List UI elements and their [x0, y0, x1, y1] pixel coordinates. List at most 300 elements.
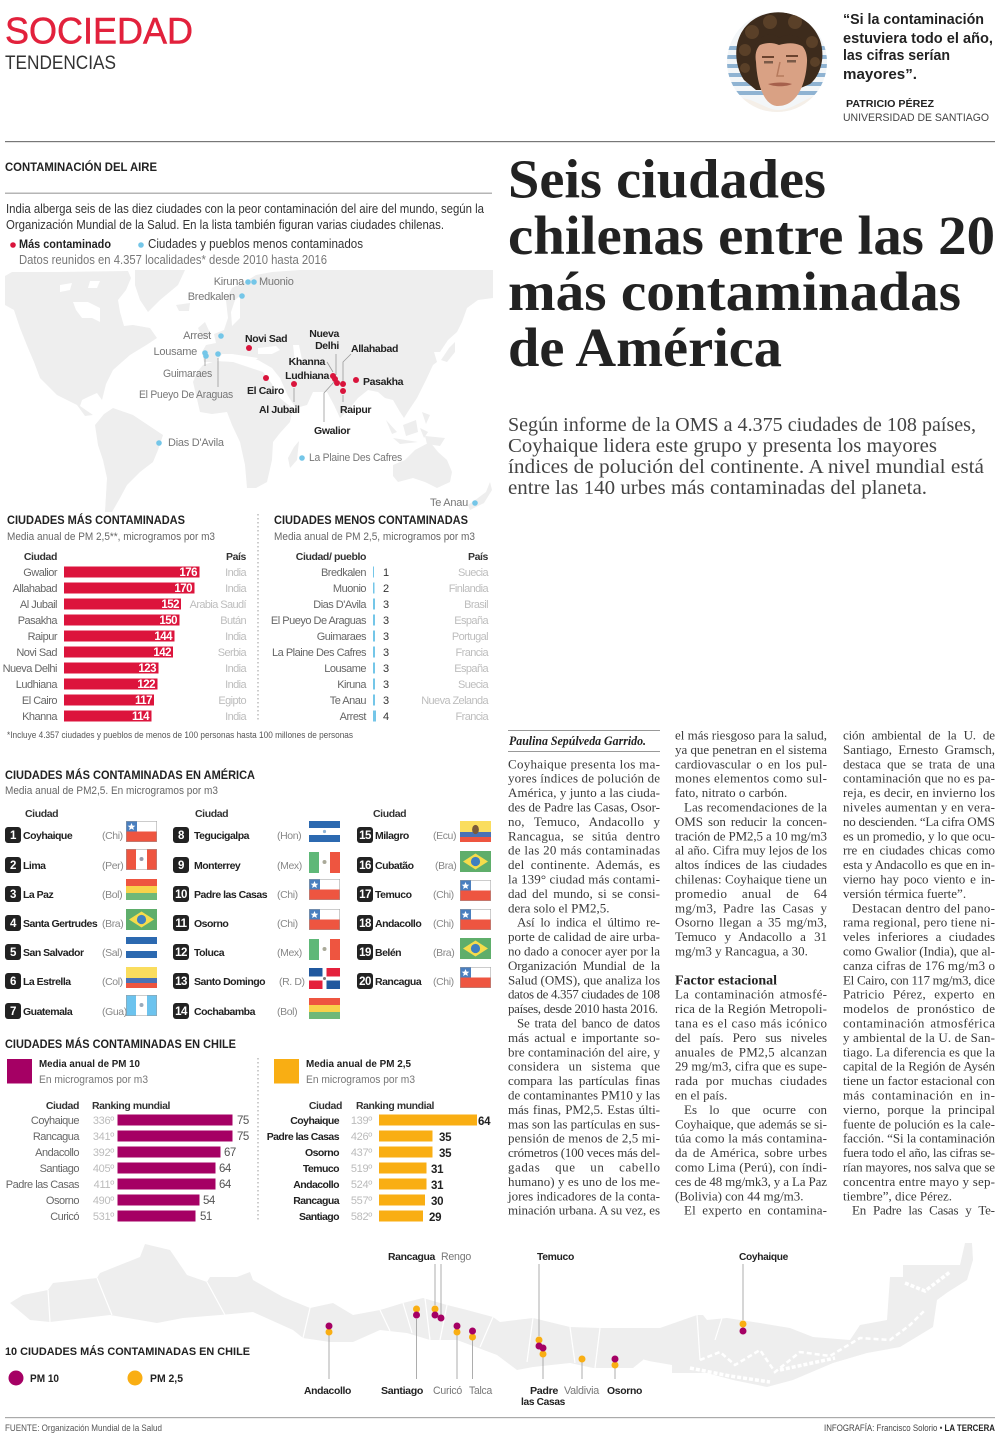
bar chart: PM 10: Rancagua	[33, 1131, 80, 1143]
table: ciudades más contaminadas: India	[225, 567, 247, 579]
table: ciudades más contaminadas: India	[225, 583, 247, 595]
table: ciudades más contaminadas: 117	[135, 695, 152, 707]
table: ciudades menos contaminadas: Francia	[456, 711, 489, 723]
list: ciudades más contaminadas en América: Tegucigalpa	[194, 830, 250, 842]
list: ciudades más contaminadas en América: 16	[359, 860, 371, 872]
world map: Bredkalen	[188, 291, 235, 303]
table: ciudades menos contaminadas: 1	[383, 567, 389, 579]
article column 2: anuales de PM2,5 alcanzan	[675, 1044, 828, 1059]
table: ciudades más contaminadas: 122	[137, 679, 155, 691]
list: ciudades más contaminadas en América: Toluca	[194, 947, 225, 959]
list: ciudades más contaminadas en América: 18	[359, 918, 372, 930]
table: ciudades menos contaminadas: Ciudad/ pueblo	[296, 551, 366, 563]
article column 3: es un promedio, y lo que ocu-	[843, 828, 995, 843]
article column 1: porte de calidad de aire urba-	[508, 929, 660, 944]
map of Chile with city markers	[10, 1243, 973, 1408]
article column 2: Osorno llegan a 35 mg/m3,	[675, 915, 827, 930]
article column 2: tana es el caso más icónico	[675, 1016, 827, 1030]
article column 2: el más riesgoso para la salud,	[675, 728, 827, 742]
article column 2: túa como la más contamina-	[675, 1131, 827, 1146]
table: ciudades menos contaminadas: Suecia	[458, 567, 489, 579]
map of Chile with city markers: Osorno	[607, 1385, 642, 1397]
list: ciudades más contaminadas en América: (Chi)	[433, 889, 454, 901]
table: ciudades más contaminadas: Ciudad	[24, 551, 57, 563]
bar chart: PM 10: 490º	[93, 1195, 114, 1207]
table: ciudades menos contaminadas: La Plaine Des Cafres	[272, 647, 367, 659]
article column 2: da de América, sobre urbes	[675, 1145, 827, 1160]
table: ciudades menos contaminadas: Nueva Zelanda	[421, 695, 489, 707]
intro text	[6, 202, 484, 232]
list: ciudades más contaminadas en América: (Mex)	[277, 947, 302, 959]
table: ciudades menos contaminadas: País	[468, 551, 489, 563]
bar chart: PM 2,5	[267, 1058, 491, 1224]
map legend	[10, 237, 363, 267]
table: ciudades más contaminadas: 170	[174, 583, 192, 595]
article column 3: versión térmica fuerte”.	[843, 886, 966, 901]
article column 2: tración de PM2,5 a 10 mg/m3	[675, 828, 827, 843]
world map: Novi Sad	[245, 333, 287, 345]
article column 2: del país. Pero sus niveles	[675, 1030, 827, 1045]
article column 3: más contaminación en in-	[843, 1088, 995, 1102]
article column 1: Organización Mundial de la	[508, 958, 660, 973]
list: ciudades más contaminadas en América: Cubatão	[375, 860, 414, 872]
world map: El Cairo	[247, 385, 284, 397]
world map: Arrest	[183, 330, 211, 342]
bar chart: PM 2,5: Rancagua	[293, 1195, 340, 1207]
article column 1: Salud (OMS), que analiza los	[508, 972, 660, 987]
bar chart: PM 10: Curicó	[50, 1211, 79, 1223]
list: ciudades más contaminadas en América: 19	[359, 947, 371, 959]
world map: Gwalior	[314, 425, 350, 437]
pull quote: “Si la contaminación	[843, 12, 984, 28]
deck: índices de polución del continente. A nivel mundial está	[508, 456, 984, 478]
deck	[508, 414, 984, 499]
bar chart: PM 10: Coyhaique	[31, 1115, 79, 1127]
list: ciudades más contaminadas en América: 20	[359, 976, 371, 988]
table: ciudades más contaminadas: CIUDADES MÁS CONTAMINADAS	[7, 512, 185, 527]
table: ciudades más contaminadas: 144	[154, 631, 173, 643]
world map: Nueva	[309, 328, 340, 340]
table: ciudades menos contaminadas: 4	[383, 711, 389, 723]
article column 1: mas son las partículas en sus-	[508, 1116, 660, 1131]
headline: de América	[508, 317, 782, 378]
article column 1: crómetros (100 veces más del-	[508, 1145, 660, 1160]
table: ciudades más contaminadas: 150	[159, 615, 177, 627]
bar chart: PM 2,5: 64	[478, 1116, 491, 1128]
headline: chilenas entre las 20	[508, 205, 995, 266]
headline: Seis ciudades	[508, 148, 826, 210]
article column 3: El Cairo, con 117 mg/m3, dice	[843, 972, 995, 987]
list: ciudades más contaminadas en América: 17	[359, 889, 371, 901]
bar chart: PM 10: En microgramos por m3	[39, 1074, 148, 1086]
article column 3: contaminación que no es pa-	[843, 771, 995, 786]
article column 3: canza cifras de 176 mg/m3 o	[843, 958, 995, 973]
list: ciudades más contaminadas en América: (Chi)	[277, 918, 298, 930]
table: ciudades más contaminadas: India	[225, 711, 247, 723]
article column 3: Santiago, Ernesto Gramsch,	[843, 742, 995, 757]
article column 1: considera un sistema que	[508, 1059, 660, 1074]
table: ciudades más contaminadas: Ludhiana	[16, 679, 58, 691]
list: ciudades más contaminadas en América: Monterrey	[194, 860, 241, 872]
list: ciudades más contaminadas en América: (Bra)	[435, 860, 456, 872]
bar chart: PM 2,5: 29	[429, 1212, 441, 1224]
bar chart: PM 10: Andacollo	[35, 1147, 79, 1159]
article column 3: no descienden. “La cifra OMS	[843, 814, 995, 829]
world map: Dias D'Avila	[168, 437, 225, 449]
pull quote	[843, 12, 993, 124]
bar chart: PM 10	[6, 1058, 249, 1223]
map legend: 10 ciudades más contaminadas en Chile: 10 CIUDADES MÁS CONTAMINADAS EN CHILE	[5, 1345, 250, 1358]
world map: El Pueyo De Araguas	[139, 389, 234, 401]
world map: Kiruna	[214, 276, 245, 288]
table: ciudades más contaminadas: 176	[179, 567, 197, 579]
table: ciudades más contaminadas: País	[226, 551, 247, 563]
intro text: Organización Mundial de la Salud. En la lista también figuran varias ciudades chilenas.	[6, 218, 444, 232]
map of Chile with city markers: Curicó	[433, 1385, 462, 1397]
pull quote: PATRICIO PÉREZ	[846, 97, 935, 110]
list: ciudades más contaminadas en América: 3	[10, 889, 16, 901]
bar chart: PM 2,5: Santiago	[299, 1211, 339, 1223]
bar chart: PM 2,5: 139º	[351, 1115, 372, 1127]
article column 2: Es lo que ocurre con	[684, 1102, 828, 1117]
list: ciudades más contaminadas en América: (Chi)	[102, 830, 123, 842]
world map: La Plaine Des Cafres	[309, 452, 403, 464]
table: ciudades menos contaminadas: 3	[383, 647, 389, 659]
map of Chile with city markers: Rancagua	[388, 1251, 435, 1263]
list: ciudades más contaminadas en América: 5	[10, 947, 17, 959]
table: ciudades más contaminadas: Khanna	[22, 711, 58, 723]
article column 2: promedio anual de 64	[675, 886, 828, 901]
pull quote: mayores”.	[843, 67, 917, 83]
table: ciudades más contaminadas: El Cairo	[22, 695, 57, 707]
table: ciudades más contaminadas: Al Jubail	[20, 599, 57, 611]
bar chart: PM 10: Ciudad	[46, 1100, 79, 1112]
article column 1: Así lo indica el último re-	[517, 915, 660, 930]
world map: Te Anau	[430, 497, 468, 509]
article column 3: vierno, porque la principal	[843, 1102, 995, 1117]
article column 3: fuente de polución es la cale-	[843, 1116, 995, 1131]
table: ciudades menos contaminadas: Kiruna	[337, 679, 367, 691]
list: ciudades más contaminadas en América: 8	[178, 830, 185, 842]
pull quote: las cifras serían	[843, 48, 950, 64]
deck: Según informe de la OMS a 4.375 ciudades de 108 países,	[508, 414, 976, 436]
map legend: 10 ciudades más contaminadas en Chile: PM 10	[30, 1373, 59, 1385]
article column 1: minación urbana. A su vez, es	[508, 1203, 660, 1218]
pull quote: estuviera todo el año,	[843, 31, 993, 47]
table: ciudades menos contaminadas: 3	[383, 615, 389, 627]
pull quote: UNIVERSIDAD DE SANTIAGO	[843, 112, 989, 124]
map of Chile with city markers: Andacollo	[304, 1385, 351, 1397]
table: ciudades más contaminadas: Pasakha	[18, 615, 58, 627]
map legend: Más contaminado	[19, 237, 111, 251]
article column 2: (Bolivia) con 44 mg/m3.	[675, 1188, 804, 1203]
list: ciudades más contaminadas en América: Milagro	[375, 830, 409, 842]
bar chart: PM 10: 336º	[93, 1115, 114, 1127]
list: ciudades más contaminadas en América: Andacollo	[375, 918, 421, 930]
list: ciudades más contaminadas en América: (Chi)	[277, 889, 298, 901]
map legend: 10 ciudades más contaminadas en Chile: PM 2,5	[150, 1373, 183, 1385]
source and credit	[5, 1423, 995, 1434]
list: ciudades más contaminadas en América: 13	[175, 976, 187, 988]
table: ciudades menos contaminadas: El Pueyo De Araguas	[271, 615, 367, 627]
map of Chile with city markers: las Casas	[521, 1396, 565, 1408]
world map: Delhi	[315, 340, 339, 352]
list: ciudades más contaminadas en América: Lima	[23, 860, 46, 872]
section header	[5, 10, 193, 74]
world map: Muonio	[259, 276, 294, 288]
list: ciudades más contaminadas en América: Belén	[375, 947, 401, 959]
map legend: Datos reunidos en 4.357 localidades* desde 2010 hasta 2016	[19, 253, 327, 267]
section header: TENDENCIAS	[5, 53, 116, 74]
list: ciudades más contaminadas en América: (R. D)	[279, 976, 305, 988]
map legend: Ciudades y pueblos menos contaminados	[148, 237, 363, 251]
bar chart: PM 2,5: 31	[431, 1180, 444, 1192]
list: ciudades más contaminadas en América: Santo Domingo	[194, 976, 265, 988]
article column 2: altos índices de las ciudades	[675, 857, 827, 872]
list: ciudades más contaminadas en América: Cochabamba	[194, 1006, 256, 1018]
bar chart: PM 2,5: Padre las Casas	[267, 1131, 340, 1143]
article column 3: esta y Andacollo es que en in-	[843, 857, 995, 872]
article column 2: como Lima (Perú), con índi-	[675, 1160, 827, 1174]
bar chart: PM 10: 341º	[93, 1131, 114, 1143]
table: ciudades menos contaminadas: 3	[383, 679, 389, 691]
article column 2: Factor estacional	[675, 973, 777, 988]
bar chart: PM 10: Padre las Casas	[6, 1179, 80, 1191]
article column 1: dad del mundo, si se consi-	[508, 886, 660, 901]
table: ciudades menos contaminadas: Muonio	[333, 583, 366, 595]
table: ciudades menos contaminadas: 3	[383, 695, 389, 707]
bar chart: PM 10: 67	[224, 1147, 236, 1159]
article column 1: Rancagua, se sitúa dentro	[508, 828, 660, 843]
byline: Paulina Sepúlveda Garrido.	[509, 734, 646, 748]
bar chart: PM 2,5: Ranking mundial	[356, 1100, 434, 1112]
list: ciudades más contaminadas en América: (Bra)	[102, 918, 123, 930]
table: ciudades menos contaminadas: Arrest	[340, 711, 366, 723]
article column 2: mg/m3, Padre las Casas y	[675, 900, 828, 915]
article column 3: modelos de pronóstico de	[843, 1001, 995, 1016]
bar chart: PM 2,5: 437º	[351, 1147, 372, 1159]
article column 2: mones elementos como sul-	[675, 771, 827, 786]
list: ciudades más contaminadas en América: (Bol)	[277, 1006, 297, 1018]
table: ciudades más contaminadas: Nueva Delhi	[3, 663, 57, 675]
article column 1: des de Padre las Casas, Osor-	[508, 800, 660, 814]
article column 2: ya que penetran en el sistema	[675, 742, 827, 757]
article column 2: Temuco y Andacollo a 31	[675, 929, 827, 944]
article column 3: rama regional, pero tiene ni-	[843, 915, 995, 930]
list: ciudades más contaminadas en América: La Paz	[23, 889, 54, 901]
heading: ciudades más contaminadas en Chile: CIUDADES MÁS CONTAMINADAS EN CHILE	[5, 1036, 236, 1051]
article column 3: tiago. La diferencia es que la	[843, 1044, 995, 1059]
bar chart: PM 2,5: 524º	[351, 1179, 372, 1191]
article column 1: la 139° ciudad más contami-	[508, 872, 660, 886]
article column 2: cardiovascular o en los pul-	[675, 756, 827, 771]
world map: Raipur	[340, 404, 371, 416]
world map: Lousame	[153, 346, 197, 358]
list: ciudades más contaminadas en América: Coyhaique	[23, 830, 73, 842]
bar chart: PM 2,5: Ciudad	[309, 1100, 342, 1112]
article column 2: al año. Cifra muy lejos de los	[675, 843, 827, 858]
list: ciudades más contaminadas en América: (Chi)	[433, 976, 454, 988]
world map: Ludhiana	[285, 370, 330, 382]
table: ciudades menos contaminadas: 3	[383, 599, 389, 611]
article column 1: jores indicadores de la conta-	[507, 1188, 660, 1203]
list: ciudades más contaminadas en América: (Gua)	[102, 1006, 127, 1018]
article column 3: niveles aumentan y en vera-	[843, 800, 995, 814]
list: ciudades más contaminadas en América: 11	[175, 918, 188, 930]
article column 1: del continente. Además, es	[508, 857, 660, 872]
table: ciudades más contaminadas: 114	[132, 711, 150, 723]
list: ciudades más contaminadas en América: Media anual de PM2,5. En microgramos por m3	[5, 785, 218, 797]
bar chart: PM 10: 392º	[93, 1147, 114, 1159]
table: ciudades más contaminadas: Serbia	[218, 647, 247, 659]
article column 2: rada por muchas ciudades	[675, 1073, 827, 1088]
article column 2: ces de 48 mg/mk3, y a La Paz	[675, 1174, 827, 1189]
article column 3: Patricio Pérez, experto en	[843, 987, 996, 1002]
bar chart: PM 2,5: 557º	[351, 1195, 372, 1207]
table: ciudades menos contaminadas: Dias D'Avila	[313, 599, 367, 611]
list: ciudades más contaminadas en América: (Hon)	[277, 830, 301, 842]
list: ciudades más contaminadas en América: Ciudad	[25, 808, 58, 820]
bar chart: PM 2,5: 426º	[351, 1131, 372, 1143]
source and credit: FUENTE: Organización Mundial de la Salud	[5, 1423, 162, 1434]
table: ciudades menos contaminadas: 3	[383, 631, 389, 643]
bar chart: PM 10: 51	[200, 1211, 212, 1223]
table: ciudades menos contaminadas: Portugal	[452, 631, 488, 643]
list: ciudades más contaminadas en América: Ciudad	[373, 808, 406, 820]
article column 3	[843, 728, 996, 1218]
bar chart: PM 2,5: 582º	[351, 1211, 372, 1223]
bar chart: PM 2,5: Andacollo	[293, 1179, 339, 1191]
table: ciudades menos contaminadas: 2	[383, 583, 389, 595]
table: ciudades más contaminadas: Media anual de PM 2,5**, microgramos por m3	[7, 531, 215, 543]
map of Chile with city markers: Padre	[530, 1385, 559, 1397]
list: ciudades más contaminadas en América: Santa Gertrudes	[23, 918, 98, 930]
article column 2: Las recomendaciones de la	[684, 800, 827, 814]
table: ciudades menos contaminadas: Brasil	[464, 599, 488, 611]
list: ciudades más contaminadas en América: 2	[10, 860, 16, 872]
table: ciudades menos contaminadas	[271, 513, 489, 723]
table: ciudades más contaminadas: Bután	[220, 615, 246, 627]
list: ciudades más contaminadas en América: San Salvador	[23, 947, 84, 959]
article column 1: yores índices de polución de	[508, 771, 660, 786]
table: ciudades más contaminadas: Gwalior	[23, 567, 58, 579]
table: ciudades menos contaminadas: Francia	[456, 647, 489, 659]
article column 1: datos de 4.357 ciudades de 108	[508, 987, 660, 1002]
headline	[508, 148, 995, 378]
map of Chile with city markers: Rengo	[441, 1251, 471, 1263]
article column 3: tiene un factor estacional con	[843, 1073, 996, 1088]
bar chart: PM 10: 64	[219, 1179, 232, 1191]
article column 3: contaminación atmosférica	[843, 1016, 995, 1030]
list: ciudades más contaminadas en América: Rancagua	[375, 976, 422, 988]
list: ciudades más contaminadas en América: 9	[178, 860, 184, 872]
article column 2: El experto en contamina-	[684, 1203, 827, 1218]
article column 2	[675, 728, 828, 1218]
article column 1: más actual e importante so-	[508, 1030, 660, 1045]
list: ciudades más contaminadas en América: (Per)	[102, 860, 123, 872]
map legend: 10 ciudades más contaminadas en Chile	[5, 1345, 250, 1386]
map of Chile with city markers: Temuco	[537, 1251, 574, 1263]
footnote: *Incluye 4.357 ciudades y pueblos de menos de 100 personas hasta 100 millones de personas	[7, 730, 353, 741]
list: ciudades más contaminadas en América: 4	[10, 918, 17, 930]
table: ciudades más contaminadas: India	[225, 663, 247, 675]
article column 2: fato, nitrato o carbón.	[675, 785, 787, 800]
article column 1: Coyhaique presenta los ma-	[508, 756, 660, 771]
article column 3: ción ambiental de la U. de	[843, 728, 995, 742]
table: ciudades más contaminadas: Egipto	[218, 695, 246, 707]
article column 1: América, y junto a las ciuda-	[508, 785, 660, 800]
article column 1: de las 20 más contaminadas	[508, 843, 660, 858]
bar chart: PM 2,5: 31	[431, 1164, 444, 1176]
world map: Pasakha	[363, 376, 404, 388]
bar chart: PM 10: 64	[219, 1163, 232, 1175]
bar chart: PM 2,5: Media anual de PM 2,5	[306, 1058, 411, 1070]
bar chart: PM 2,5: Osorno	[305, 1147, 339, 1159]
table: ciudades más contaminadas	[3, 512, 247, 723]
article column 2: 29 mg/m3, cifra que es supe-	[675, 1059, 827, 1074]
list: ciudades más contaminadas en América: (Ecu)	[433, 830, 456, 842]
table: ciudades más contaminadas: 142	[153, 647, 171, 659]
list: ciudades más contaminadas en América: Padre las Casas	[194, 889, 268, 901]
article column 1: compara las partículas finas	[508, 1073, 660, 1088]
article column 1	[507, 756, 660, 1218]
table: ciudades menos contaminadas: Lousame	[324, 663, 366, 675]
bar chart: PM 10: 75	[237, 1131, 249, 1143]
article column 3: veles inferiores a ciudades	[843, 929, 995, 944]
list: ciudades más contaminadas en América: La Estrella	[23, 976, 71, 988]
article column 1: no dado a conocer ayer por la	[508, 944, 660, 958]
table: ciudades más contaminadas: Raipur	[28, 631, 58, 643]
deck: Coyhaique lidera este grupo y presenta los mayores	[508, 435, 937, 457]
bar chart: PM 10: 411º	[94, 1179, 114, 1191]
article column 3: En Padre las Casas y Te-	[852, 1203, 995, 1218]
article column 3: facción. “Si la contaminación	[843, 1131, 996, 1146]
source and credit: INFOGRAFÍA: Francisco Solorio • LA TERCERA	[824, 1423, 995, 1434]
map of Chile with city markers: Santiago	[381, 1385, 423, 1397]
article column 3: tiembre”, dice Pérez.	[843, 1188, 952, 1203]
article column 2: en el país.	[675, 1088, 727, 1102]
list: ciudades más contaminadas en América: 15	[359, 830, 372, 842]
bar chart: PM 2,5: Coyhaique	[290, 1115, 340, 1127]
map of Chile with city markers: Talca	[469, 1385, 493, 1397]
table: ciudades menos contaminadas: CIUDADES MENOS CONTAMINADAS	[274, 513, 468, 527]
article column 3: y ambiental de la U. de San-	[843, 1030, 995, 1045]
list: ciudades más contaminadas en América: Guatemala	[23, 1006, 73, 1018]
article column 3: destaca que se trata de una	[843, 756, 995, 771]
list: ciudades más contaminadas en América: (Chi)	[433, 918, 454, 930]
table: ciudades más contaminadas: India	[225, 679, 247, 691]
bar chart: PM 10: 531º	[93, 1211, 114, 1223]
table: ciudades menos contaminadas: Bredkalen	[321, 567, 366, 579]
list: ciudades más contaminadas en América: (Bra)	[433, 947, 454, 959]
article column 1: dera solo el PM2,5.	[508, 900, 609, 915]
world map: Al Jubail	[259, 404, 300, 416]
icon: portrait photo of Patricio Pérez	[727, 12, 827, 116]
bar chart: PM 10: Osorno	[46, 1195, 79, 1207]
bar chart: PM 2,5: 30	[431, 1196, 443, 1208]
article column 3: rre en ciudades chicas como	[843, 843, 995, 858]
list: ciudades más contaminadas en América: 1	[10, 830, 17, 842]
article column 1: no, Temuco, Andacollo y	[508, 814, 660, 829]
list: ciudades más contaminadas en América: 7	[10, 1006, 16, 1018]
article column 2: OMS son reducir la concen-	[675, 814, 827, 829]
bar chart: PM 10: 75	[237, 1115, 249, 1127]
bar chart: PM 10: 405º	[93, 1163, 114, 1175]
world map: Allahabad	[351, 343, 398, 355]
table: ciudades más contaminadas: 123	[138, 663, 156, 675]
list: ciudades más contaminadas en América: 12	[175, 947, 187, 959]
table: ciudades menos contaminadas: Media anual de PM 2,5, microgramos por m3	[274, 531, 475, 543]
